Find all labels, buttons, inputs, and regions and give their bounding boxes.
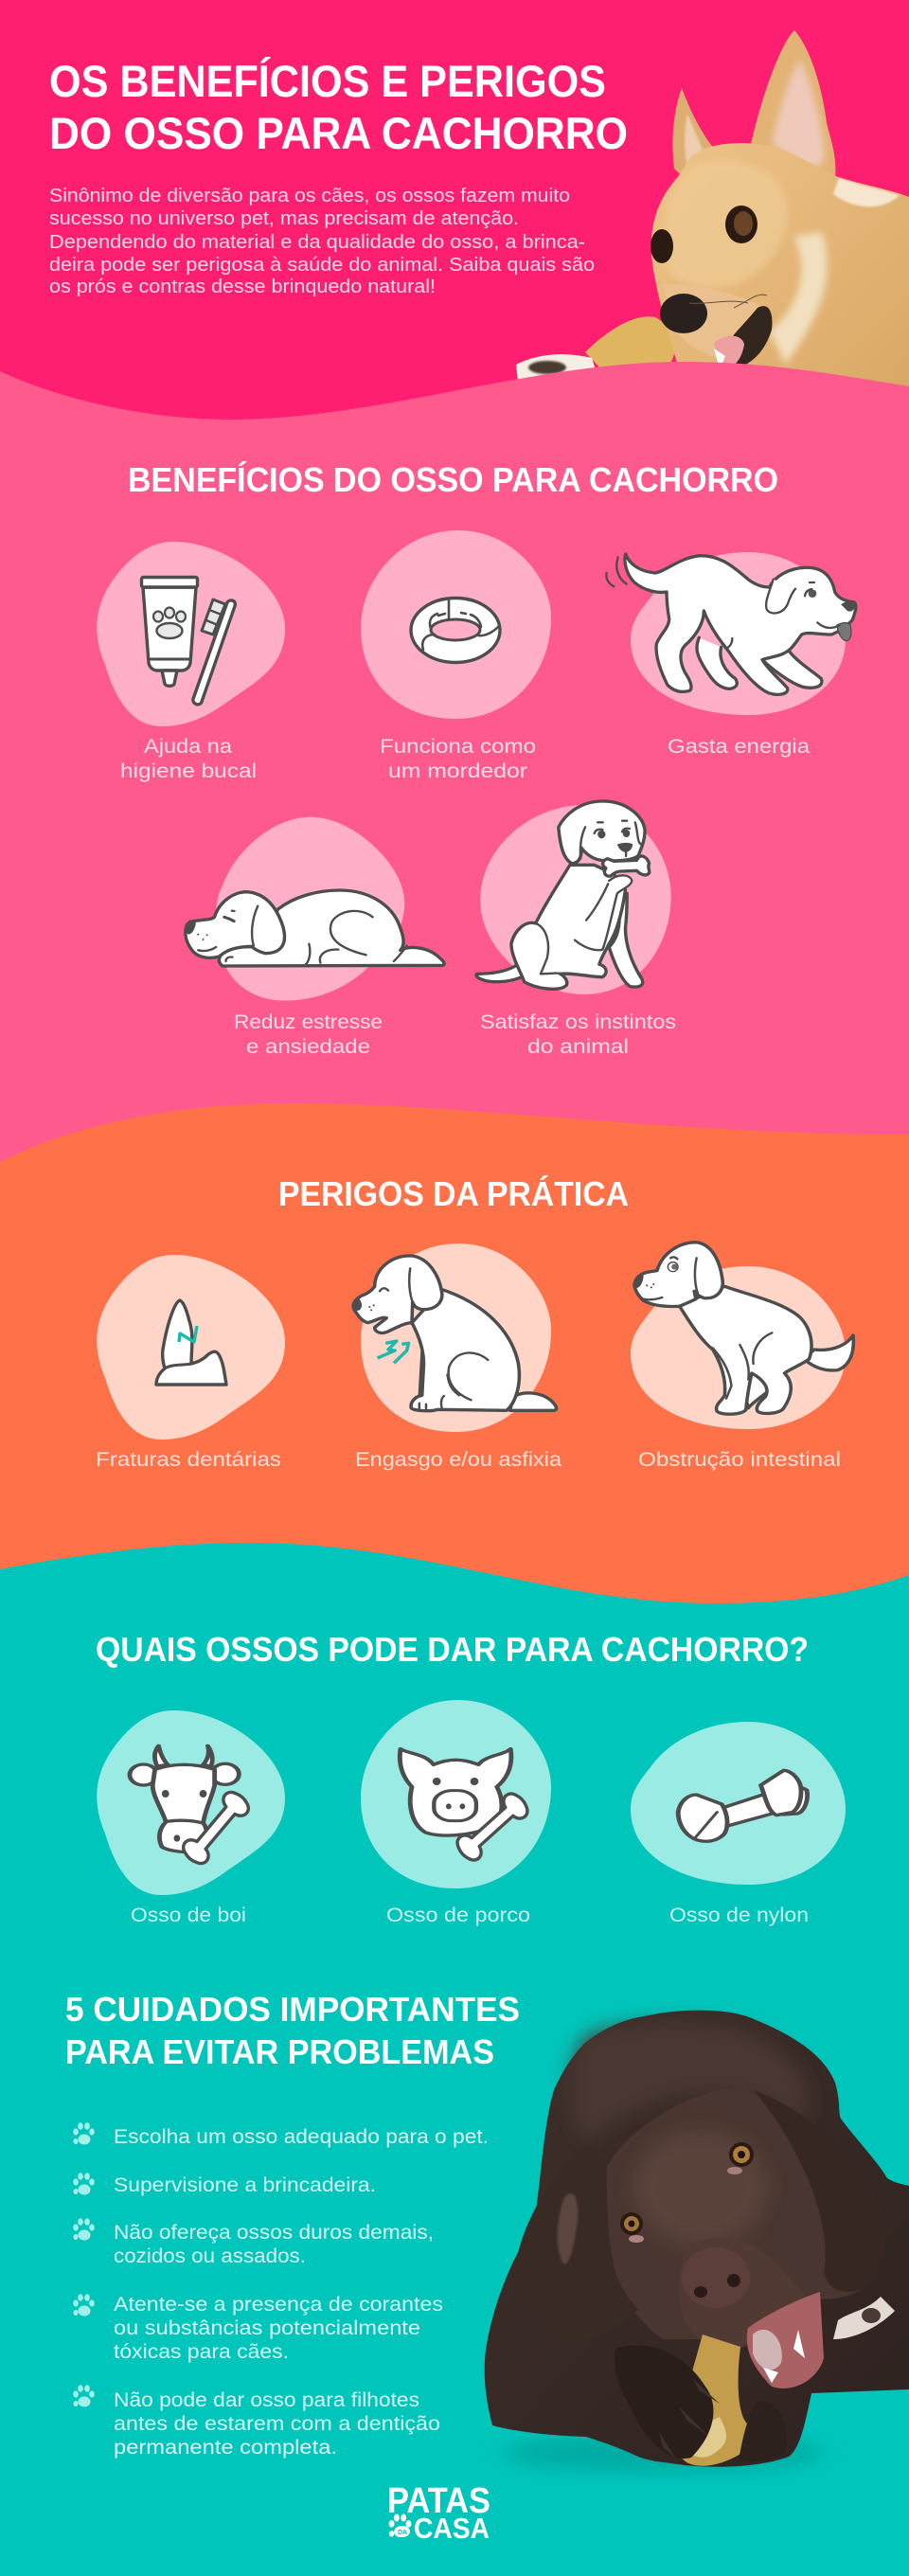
blob [361, 1243, 551, 1432]
label: Funciona como [380, 736, 536, 758]
list item 5: Não pode dar osso para filhotes [114, 2389, 419, 2411]
list item 4: Atente-se a presença de corantes [114, 2294, 443, 2316]
intro text block: deira pode ser perigosa à saúde do animal. Saiba quais são [49, 255, 595, 276]
label [480, 1011, 676, 1058]
blob [631, 552, 846, 715]
icon: knotted nylon bone [678, 1770, 808, 1841]
logo: DA [398, 2530, 407, 2536]
panel: header background [0, 0, 909, 436]
label: Ajuda na [144, 736, 232, 758]
label: Fraturas dentárias [96, 1449, 281, 1471]
logo: CASA [414, 2512, 490, 2545]
icon: cracked tooth [156, 1300, 226, 1385]
title: OS BENEFÍCIOS E PERIGOS [49, 56, 606, 106]
label: Obstrução intestinal [638, 1449, 841, 1471]
list item 3 [73, 2218, 434, 2267]
item: tooth fractures [96, 1255, 285, 1471]
panel: dangers wave background [0, 1103, 909, 1629]
blob [361, 530, 551, 719]
label: do animal [527, 1036, 629, 1058]
item: pork bone [361, 1700, 551, 1926]
heading: 5 cares: 5 CUIDADOS IMPORTANTES [65, 1990, 520, 2029]
heading: which bones: QUAIS OSSOS PODE DAR PARA CACHORRO? [96, 1630, 809, 1669]
label: Engasgo e/ou asfixia [355, 1449, 561, 1471]
intro text block: sucesso no universo pet, mas precisam de atenção. [49, 208, 519, 229]
item: burns energy [606, 552, 856, 758]
list item 4 [73, 2294, 443, 2363]
blob [480, 805, 671, 994]
list item 3: cozidos ou assados. [114, 2245, 306, 2267]
list item 4: ou substâncias potencialmente [114, 2317, 420, 2339]
item: nylon bone [631, 1722, 846, 1926]
blob [631, 1266, 846, 1429]
item: intestinal obstruction [631, 1243, 853, 1471]
icon: cow with bone [130, 1745, 253, 1868]
icon: playful dog [606, 554, 856, 694]
label [380, 736, 536, 782]
label: Gasta energia [668, 736, 810, 758]
blob [631, 1722, 846, 1885]
logo: PATAS [387, 2481, 490, 2521]
label: Reduz estresse [234, 1011, 383, 1033]
photo: chihuahua chewing a bone [516, 30, 909, 417]
care list [73, 2122, 489, 2459]
item: satisfies instincts [476, 801, 676, 1058]
panel: teal wave background [0, 1543, 909, 2576]
intro text block: os prós e contras desse brinquedo natural! [49, 277, 436, 297]
heading: 5 cares [65, 1990, 520, 2071]
list item 3: Não ofereça ossos duros demais, [114, 2222, 434, 2244]
label: e ansiedade [246, 1036, 370, 1058]
list item 5: permanente completa. [114, 2437, 337, 2459]
panel: benefits wave background [0, 362, 909, 1231]
label: um mordedor [388, 760, 527, 782]
intro text block [49, 186, 595, 297]
icon: toothpaste and toothbrush [142, 578, 235, 705]
blob [97, 542, 285, 726]
intro text block: Dependendo do material e da qualidade do osso, a brinca- [49, 232, 585, 253]
label [234, 1011, 383, 1058]
item: chew toy [361, 530, 551, 782]
item: beef bone [97, 1710, 285, 1926]
icon: squatting dog [634, 1243, 853, 1414]
heading: 5 cares: PARA EVITAR PROBLEMAS [65, 2032, 494, 2071]
label: Osso de boi [131, 1905, 246, 1926]
label [120, 736, 257, 782]
list item 5: antes de estarem com a dentição [114, 2413, 440, 2435]
icon: ring teether [411, 599, 500, 663]
label: Osso de nylon [669, 1905, 809, 1926]
label: Satisfaz os instintos [480, 1011, 676, 1033]
blob [97, 1710, 285, 1895]
list item 4: tóxicas para cães. [114, 2341, 289, 2363]
title: DO OSSO PARA CACHORRO [49, 108, 628, 158]
list item 5 [73, 2385, 440, 2459]
label: higiene bucal [120, 760, 257, 782]
photo: brown dog chewing a bone [485, 2011, 909, 2472]
label: Osso de porco [386, 1905, 530, 1926]
blob [361, 1700, 551, 1888]
blob [216, 817, 404, 1001]
heading: benefits: BENEFÍCIOS DO OSSO PARA CACHORRO [128, 460, 778, 499]
item: choking [353, 1243, 561, 1471]
list item 2: Supervisione a brincadeira. [114, 2174, 376, 2196]
logo [387, 2481, 490, 2545]
intro text block: Sinônimo de diversão para os cães, os ossos fazem muito [49, 186, 570, 206]
icon: choking dog [353, 1256, 557, 1411]
title [49, 56, 628, 158]
icon: pig with bone [400, 1749, 532, 1865]
blob [97, 1255, 285, 1440]
item: oral hygiene [97, 542, 285, 782]
heading: dangers: PERIGOS DA PRÁTICA [278, 1174, 629, 1213]
list item 1: Escolha um osso adequado para o pet. [114, 2126, 489, 2148]
icon: resting dog [186, 890, 444, 966]
icon: sitting dog with bone [476, 801, 650, 989]
item: reduces stress [186, 817, 444, 1058]
